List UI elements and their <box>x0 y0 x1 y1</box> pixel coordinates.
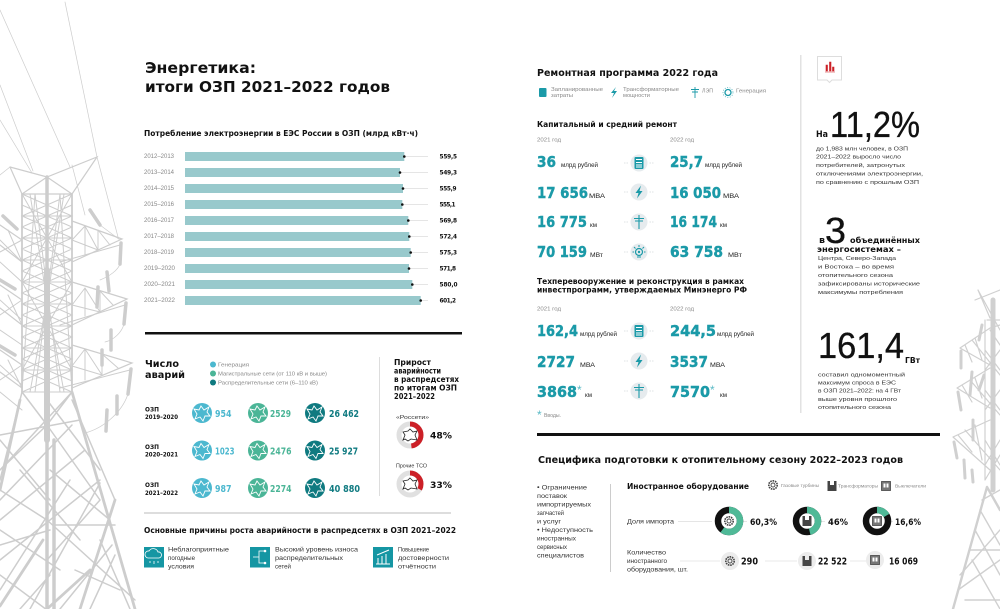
row: transformer capacity: МВА <box>589 193 606 200</box>
stat: 11,2%: 2021–2022 выросло число <box>816 154 901 160</box>
row: power lines: 16 174 <box>670 213 717 231</box>
row: foreign equipment quantity: 16 069 <box>889 556 918 568</box>
stat: 3 power systems: Центра, Северо-Запада <box>818 256 897 262</box>
subheading: re-equipment and reconstruction: инвестпрограмм, утверждаемых Минэнерго РФ <box>537 286 748 294</box>
stat: 3 power systems: максимумы потребления <box>818 290 903 296</box>
heading: accidents <box>145 359 185 381</box>
row: generation: МВт <box>590 252 603 259</box>
bar chart: 2014–2015 <box>144 186 175 192</box>
stat: 11,2%: 11,2% <box>830 104 920 145</box>
row: planned costs: 36 <box>537 153 556 171</box>
row: investment power lines: * <box>710 383 715 397</box>
subheading: re-equipment and reconstruction: Техперевооружение и реконструкция в рамках <box>537 277 744 286</box>
heading: accident growth: аварийности <box>394 366 441 376</box>
heading: causes: Основные причины роста аварийности в распредсетях в ОЗП 2021–2022 <box>144 526 456 535</box>
legend: repair program icons <box>539 87 766 99</box>
background: right power tower <box>953 290 1000 609</box>
row: investment transformer capacity: МВА <box>710 362 726 369</box>
column labels: 2021 год <box>537 138 562 144</box>
text block: constraints: сервисных <box>537 544 568 551</box>
bar chart: 575,3 <box>440 250 457 256</box>
row: ОЗП 2019–2020: 2529 <box>270 409 291 420</box>
row: investment costs: 162,4 <box>537 322 578 340</box>
row: ОЗП 2020–2021: 2020–2021 <box>145 452 178 458</box>
donut: Прочие ТСО 33%: Прочие ТСО <box>396 464 428 470</box>
column labels: 2021 год <box>537 306 562 312</box>
row: ОЗП 2019–2020 <box>145 403 359 423</box>
row: ОЗП 2019–2020: 26 462 <box>329 409 359 420</box>
bar chart: 549,3 <box>440 170 457 176</box>
text block: constraints: и услуг <box>537 518 562 526</box>
row: ОЗП 2021–2022: 2274 <box>270 484 292 495</box>
chart heading: Потребление электроэнергии в ЕЭС России в ОЗП (млрд кВт·ч) <box>144 129 418 138</box>
text block: constraints: специалистов <box>537 552 585 560</box>
icon: red chart badge <box>818 56 842 82</box>
row: ОЗП 2019–2020: 954 <box>215 409 232 420</box>
cause: worn networks <box>250 546 359 570</box>
donut: transformers 46%: 46% <box>828 518 848 528</box>
stat: 3 power systems: зафиксированы исторические <box>818 282 920 288</box>
cause: weather: условия <box>168 564 194 570</box>
text block: constraints: запчастей <box>537 509 564 517</box>
subheading: capital and medium repairs: Капитальный и средний ремонт <box>537 120 678 129</box>
panel: number of accidents <box>145 359 360 498</box>
text block: constraints: поставок <box>537 493 567 500</box>
donut: gas turbines 60,3% <box>718 510 777 532</box>
text block: constraints: иностранных <box>537 536 577 542</box>
donut: Россети 48%: «Россети» <box>396 415 429 421</box>
column labels <box>537 138 695 144</box>
donut: Россети 48% <box>396 415 452 446</box>
row: transformer capacity: МВА <box>723 193 740 200</box>
row: foreign equipment quantity: Количество <box>627 550 667 556</box>
row: foreign equipment quantity: оборудования, шт. <box>627 566 688 574</box>
heading: accidents: аварий <box>145 370 185 381</box>
stat: 161,4 GW: выше уровня прошлого <box>818 397 897 403</box>
panel: electricity consumption chart <box>144 129 458 305</box>
bar chart: 559,5 <box>440 154 457 160</box>
bar chart: 2018–2019 <box>144 250 175 256</box>
bar chart: 2012–2013 <box>144 154 175 160</box>
footnote <box>537 408 561 422</box>
row: generation <box>537 243 742 261</box>
donut: gas turbines 60,3%: 60,3% <box>750 518 777 528</box>
row: investment transformer capacity: МВА <box>580 362 596 369</box>
legend: repair program icons: Генерация <box>736 88 766 94</box>
stat: 3 power systems: объединённых <box>850 235 921 245</box>
bar chart: 572,4 <box>440 234 457 240</box>
footnote: Вводы. <box>544 413 561 419</box>
row: investment power lines <box>537 382 727 401</box>
row: planned costs: млрд рублей <box>705 161 742 169</box>
stat: 11,2%: отключениями электроэнергии, <box>816 172 923 178</box>
cause: weather <box>144 546 230 570</box>
title: итоги ОЗП 2021–2022 годов <box>145 78 390 96</box>
cause: reporting reliability: отчётности <box>398 564 437 570</box>
title: Энергетика: <box>145 59 256 77</box>
cause: weather: погодные <box>168 555 195 562</box>
row: power lines: 16 775 <box>537 213 587 231</box>
row: import share: Доля импорта <box>627 518 675 526</box>
legend: equipment types: Трансформаторы <box>838 484 878 488</box>
stat: 161,4 GW: в ОЗП 2021–2022: на 4 ГВт <box>818 388 901 394</box>
row: power lines: км <box>590 222 597 229</box>
row: investment transformer capacity <box>537 352 726 371</box>
stat: 161,4 GW: 161,4 <box>818 325 904 366</box>
stat: 3 power systems: энергосистемах – <box>817 245 901 254</box>
bar chart: 580,0 <box>440 282 458 288</box>
column labels: 2022 год <box>670 306 695 312</box>
stat: 161,4 GW: максимум спроса в ЕЭС <box>818 380 896 386</box>
row: ОЗП 2019–2020: 2019–2020 <box>145 415 178 421</box>
row: investment transformer capacity: 2727 <box>537 353 575 371</box>
cause: worn networks: распределительных <box>275 555 344 562</box>
row: investment costs <box>537 322 754 340</box>
cause: worn networks: Высокий уровень износа <box>275 546 359 554</box>
bar chart: 571,8 <box>440 266 456 272</box>
row: generation: МВт <box>728 252 742 259</box>
row: planned costs: млрд рублей <box>561 161 598 169</box>
row: import share <box>627 510 921 532</box>
row: ОЗП 2020–2021: 2476 <box>270 446 292 458</box>
legend: equipment types: Газовые турбины <box>781 483 819 488</box>
legend: equipment types: Выключатели <box>895 484 927 488</box>
row: planned costs <box>537 153 742 172</box>
cause: worn networks: сетей <box>275 562 291 570</box>
stat: 161,4 GW: отопительного сезона <box>818 405 892 411</box>
bar chart: 569,8 <box>440 218 457 224</box>
text block: constraints: • Недоступность <box>537 527 594 534</box>
heading: accident growth <box>394 358 459 401</box>
text block: constraints <box>537 484 594 560</box>
bar chart: 2013–2014 <box>144 170 175 176</box>
bar chart: 555,9 <box>440 186 456 192</box>
stat: 3 power systems <box>817 210 921 296</box>
row: transformer capacity: 16 050 <box>670 184 721 202</box>
stat: 11,2%: потребителей, затронутых <box>816 162 905 169</box>
row: power lines <box>537 213 727 231</box>
donut: transformers 46% <box>796 510 848 532</box>
legend: repair program icons: затраты <box>551 93 573 99</box>
stat: 11,2%: по сравнению с прошлым ОЗП <box>816 180 919 186</box>
bar chart: 2021–2022 <box>144 298 176 304</box>
bar chart: 601,2 <box>440 298 456 304</box>
bar chart: 2015–2016 <box>144 202 175 208</box>
legend: accident categories <box>210 362 327 386</box>
panel: repair program 2022 <box>537 68 766 422</box>
row: investment power lines: 7570 <box>670 383 710 401</box>
cause: weather: Неблагоприятные <box>168 546 230 554</box>
stat: 161,4 GW: ГВт <box>905 356 920 365</box>
row: investment power lines: км <box>585 392 592 399</box>
panel: key figures <box>816 56 923 411</box>
heading: repair program: Ремонтная программа 2022 года <box>537 68 718 79</box>
donut: switches 16,6%: 16,6% <box>895 518 921 528</box>
panel: heating season preparation <box>537 454 927 574</box>
background: left power tower <box>0 2 135 609</box>
legend: repair program icons: Запланированные <box>551 87 603 93</box>
column labels <box>537 306 695 312</box>
heading: accident growth: 2021–2022 <box>394 392 435 401</box>
row: investment costs: млрд рублей <box>717 330 754 338</box>
text block: constraints: импортируемых <box>537 502 592 508</box>
stat: 161,4 GW: составил одномоментный <box>818 372 905 378</box>
bar chart: 2019–2020 <box>144 266 176 272</box>
legend: repair program icons: ЛЭП <box>702 88 713 94</box>
cause: reporting reliability: Повышение <box>398 546 429 554</box>
heading: accident growth: по итогам ОЗП <box>394 384 457 392</box>
row: investment costs: 244,5 <box>670 322 716 340</box>
row: ОЗП 2020–2021: 1023 <box>215 446 234 458</box>
row: ОЗП 2021–2022: 2021–2022 <box>145 491 178 497</box>
row: planned costs: 25,7 <box>670 153 703 171</box>
row: transformer capacity: 17 656 <box>537 184 588 202</box>
row: investment power lines: 3868 <box>537 383 577 401</box>
donut: Прочие ТСО 33% <box>396 464 452 495</box>
row: foreign equipment quantity <box>627 550 918 574</box>
row: ОЗП 2021–2022 <box>145 478 360 498</box>
row: investment transformer capacity: 3537 <box>670 353 708 371</box>
heading: accidents: Число <box>145 359 179 370</box>
cause: reporting reliability: достоверности <box>398 555 450 562</box>
row: transformer capacity <box>537 184 740 202</box>
stat: 3 power systems: 3 <box>825 210 846 251</box>
stat: 11,2% <box>816 104 923 186</box>
legend: accident categories: Генерация <box>218 362 249 368</box>
row: ОЗП 2021–2022: 40 880 <box>329 484 360 495</box>
legend: accident categories: Распределительные сети (6–110 кВ) <box>218 380 318 386</box>
heading: accident growth: в распредсетях <box>394 375 459 384</box>
cause: reporting reliability <box>373 546 450 570</box>
bar chart: 555,1 <box>440 202 456 208</box>
row: foreign equipment quantity: иностранного <box>627 558 668 565</box>
title <box>145 59 390 96</box>
subheading: foreign equipment: Иностранное оборудование <box>627 482 749 491</box>
row: power lines: км <box>720 222 727 229</box>
stat: 11,2%: На <box>816 130 828 140</box>
row: ОЗП 2021–2022: ОЗП <box>145 483 159 489</box>
bar chart: 2016–2017 <box>144 218 175 224</box>
donut: Прочие ТСО 33%: 33% <box>430 481 452 491</box>
bar chart: 2017–2018 <box>144 234 175 240</box>
row: ОЗП 2021–2022: 987 <box>215 484 232 495</box>
legend: equipment types <box>769 481 927 491</box>
row: ОЗП 2019–2020: ОЗП <box>145 408 159 414</box>
stat: 3 power systems: и Востока – во время <box>818 264 894 270</box>
stat: 3 power systems: отопительного сезона <box>818 273 894 279</box>
legend: accident categories: Магистральные сети (от 110 кВ и выше) <box>218 372 327 378</box>
row: generation: 63 758 <box>670 243 723 261</box>
heading: heating season: Специфика подготовки к отопительному сезону 2022–2023 годов <box>538 454 903 466</box>
subheading: re-equipment and reconstruction <box>537 277 748 294</box>
row: ОЗП 2020–2021: 25 927 <box>329 446 358 458</box>
donut: switches 16,6% <box>866 510 921 532</box>
panel: accident growth in distribution networks <box>394 358 459 495</box>
row: foreign equipment quantity: 290 <box>741 556 758 568</box>
row: investment power lines: км <box>720 392 727 399</box>
bar chart <box>144 152 458 305</box>
stat: 161,4 GW <box>818 325 920 411</box>
legend: repair program icons: Трансформаторные <box>623 87 679 93</box>
row: foreign equipment quantity: 22 522 <box>818 556 847 568</box>
panel: main causes of accident growth <box>144 526 456 570</box>
heading: accident growth: Прирост <box>394 358 432 367</box>
donut: Россети 48%: 48% <box>430 432 452 442</box>
stat: 3 power systems: в <box>819 236 825 246</box>
text block: constraints: • Ограничение <box>537 484 588 492</box>
row: ОЗП 2020–2021: ОЗП <box>145 445 159 451</box>
stat: 11,2%: до 1,983 млн человек, в ОЗП <box>816 146 908 152</box>
row: ОЗП 2020–2021 <box>145 440 358 460</box>
column labels: 2022 год <box>670 138 695 144</box>
row: generation: 70 159 <box>537 243 587 261</box>
row: investment costs: млрд рублей <box>580 330 617 338</box>
row: investment power lines: * <box>577 383 582 397</box>
bar chart: 2020–2021 <box>144 282 176 288</box>
legend: repair program icons: мощности <box>623 93 650 99</box>
footnote: * <box>537 408 542 422</box>
